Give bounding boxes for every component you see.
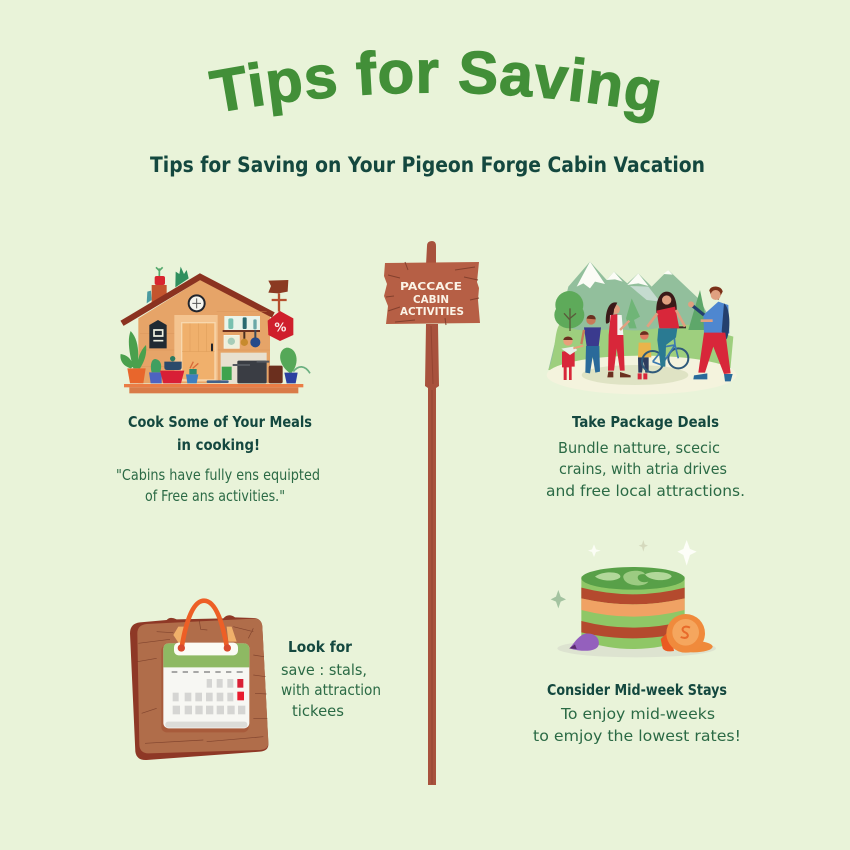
pole (425, 241, 439, 785)
text block: consider mid-week stays (533, 681, 741, 745)
icon: cabin kitchen: % (274, 320, 286, 334)
text block: look for: save : stals, (281, 661, 367, 679)
text block: cook some of your meals: of Free ans activities." (145, 487, 285, 505)
icon: stack of money and coins (551, 540, 716, 657)
bicycle and rider (642, 292, 688, 372)
wooden signpost (384, 241, 480, 785)
text block: take package deals: and free local attractions. (546, 482, 745, 500)
text block: look for: Look for (288, 638, 353, 656)
sign lettering: PACCACE (400, 281, 462, 293)
icon: family in the mountains (547, 262, 737, 394)
text block: cook some of your meals: in cooking! (177, 436, 260, 454)
text block: consider mid-week stays: Consider Mid-week Stays (547, 681, 727, 699)
icon: calendar on wood board (130, 601, 268, 760)
toddler (561, 336, 583, 380)
text block: look for: with attraction (281, 681, 381, 699)
calendar day cells (173, 679, 245, 714)
man with backpack (688, 287, 733, 381)
sign lettering: ACTIVITIES (400, 306, 464, 318)
text block: take package deals (546, 413, 745, 500)
title: Tips for Saving (208, 50, 660, 124)
sign board (384, 262, 480, 324)
text block: take package deals: Take Package Deals (572, 413, 719, 431)
text block: take package deals: crains, with atria drives (559, 460, 727, 478)
girl in red and white (606, 302, 631, 377)
sparkles (551, 540, 697, 608)
text block: cook some of your meals: Cook Some of Your Meals (128, 413, 312, 431)
text block: look for: tickees (292, 702, 344, 720)
small boy in yellow (638, 331, 651, 379)
boy in navy (581, 315, 601, 373)
sign lettering: CABIN (413, 294, 449, 306)
text block: consider mid-week stays: To enjoy mid-weeks (560, 705, 715, 723)
text block: look for (281, 638, 381, 720)
text block: cook some of your meals: "Cabins have fully ens equipted (116, 466, 320, 484)
text block: take package deals: Bundle natture, scecic (558, 439, 720, 457)
text block: consider mid-week stays: to emjoy the lowest rates! (533, 727, 741, 745)
subtitle: Tips for Saving on Your Pigeon Forge Cabin Vacation (150, 153, 705, 177)
text block: cook some of your meals (116, 413, 320, 505)
icon: cabin kitchen (120, 267, 310, 393)
